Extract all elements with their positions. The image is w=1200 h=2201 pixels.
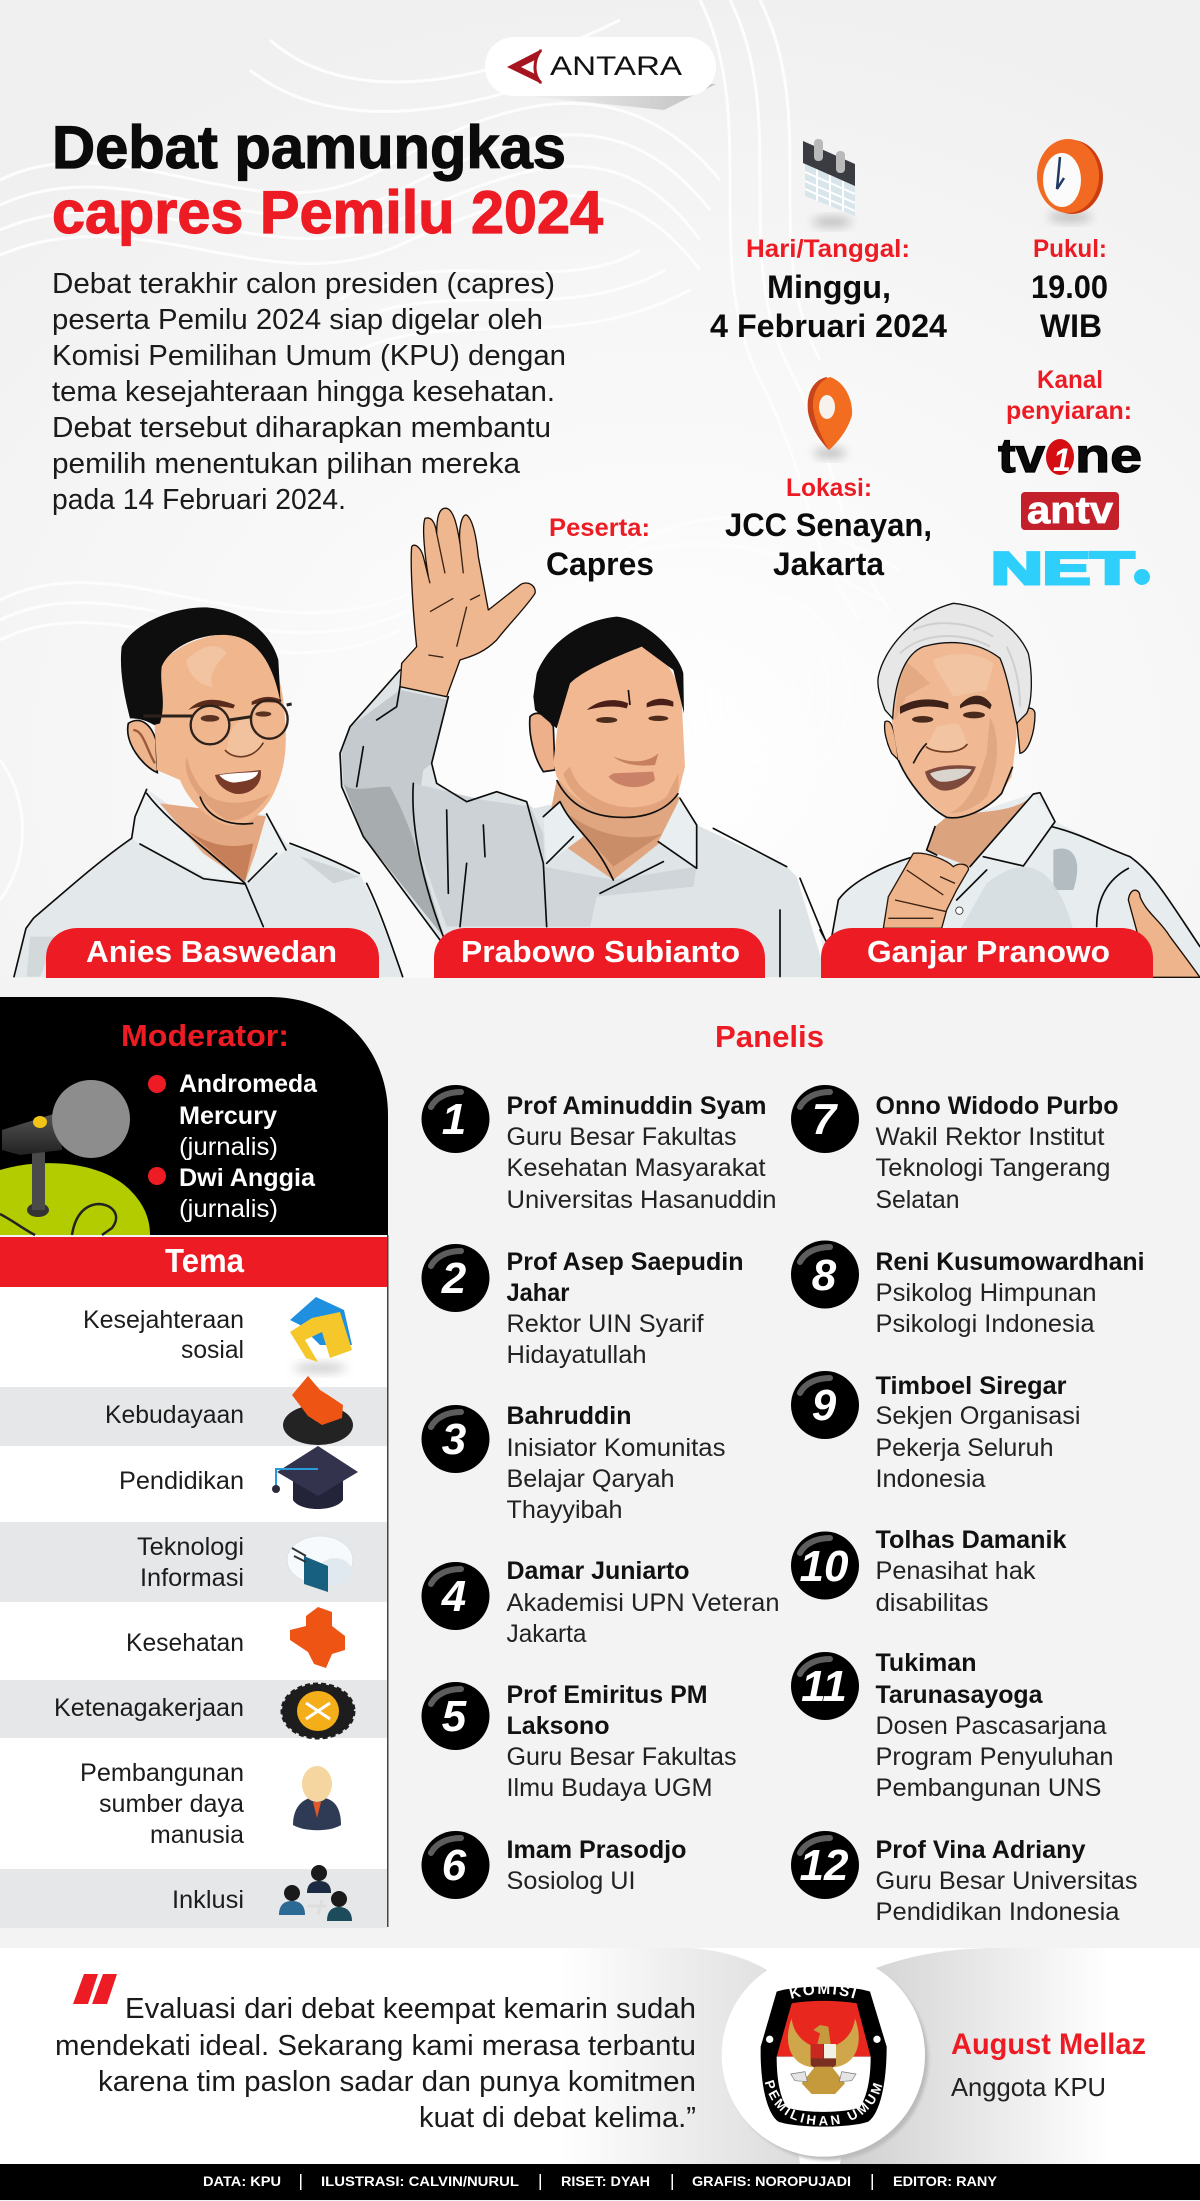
panelist 10: Penasihat hak [876, 1557, 1036, 1585]
footer credits: ILUSTRASI: CALVIN/NURUL [321, 2174, 519, 2189]
labels: date: Minggu, [767, 269, 891, 305]
theme: Kesejahteraan sosial: sosial [181, 1336, 244, 1364]
quote text: kuat di debat kelima.” [419, 2102, 696, 2134]
illustration: Ganjar Pranowo [820, 603, 1200, 977]
title [52, 114, 604, 246]
labels: broadcast channels: penyiaran: [1006, 397, 1132, 425]
logo: NET: NET [991, 543, 1134, 594]
labels: time: WIB [1040, 308, 1102, 344]
quote text [55, 1993, 696, 2134]
panel: moderator [0, 997, 388, 1235]
labels: broadcast channels [1006, 366, 1132, 425]
panelist 3: Bahruddin [506, 1402, 632, 1430]
panelist 4: 4 [441, 1572, 466, 1621]
quote text: Evaluasi dari debat keempat kemarin sudah [125, 1993, 696, 2025]
panelist 4: Akademisi UPN Veteran [506, 1589, 780, 1617]
icon: quote marks [73, 1974, 117, 2004]
intro text block: pemilih menentukan pilihan mereka [52, 448, 521, 480]
theme: Kebudayaan [105, 1376, 353, 1445]
panelist 10: disabilitas [876, 1589, 988, 1617]
name tag: Anies Baswedan [46, 928, 379, 978]
theme: Pembangunan sumber daya manusia [80, 1759, 341, 1849]
title: capres Pemilu 2024 [52, 179, 604, 246]
panelist 2: Prof Asep Saepudin [506, 1248, 744, 1276]
panelist 7: Onno Widodo Purbo [876, 1092, 1118, 1120]
panel: themes [0, 1235, 388, 1928]
panelist 11 [791, 1649, 1114, 1802]
footer credits: DATA: KPU [203, 2174, 281, 2189]
panelist 12: Pendidikan Indonesia [876, 1898, 1120, 1926]
name tag: Prabowo Subianto: Prabowo Subianto [461, 934, 740, 969]
intro text block: pada 14 Februari 2024. [52, 484, 346, 516]
moderator list: (jurnalis) [179, 1133, 278, 1161]
panelist 8: 8 [812, 1251, 837, 1300]
KPU logo badge: PEMILIHAN UMUM [764, 2080, 882, 2126]
source: August Mellaz [951, 2028, 1146, 2102]
panelist 5: Guru Besar Fakultas [506, 1743, 736, 1771]
theme: Teknologi Informasi: Informasi [140, 1564, 244, 1592]
panelist 10: Tolhas Damanik [876, 1526, 1067, 1554]
intro text block: Komisi Pemilihan Umum (KPU) dengan [52, 340, 566, 372]
panelist 11: Tarunasayoga [876, 1681, 1044, 1709]
heading: panelis: Panelis [715, 1019, 824, 1054]
panelist 8: Psikolog Himpunan [876, 1279, 1096, 1307]
labels: location: Jakarta [773, 546, 884, 582]
panelist 10: 10 [800, 1542, 849, 1591]
panelist 7: Teknologi Tangerang [876, 1154, 1110, 1182]
panelist 9 [791, 1371, 1080, 1493]
quote text: mendekati ideal. Sekarang kami merasa terbantu [55, 2030, 696, 2062]
theme: Ketenagakerjaan [54, 1684, 354, 1738]
source: August Mellaz: Anggota KPU [951, 2072, 1106, 2102]
logo: antv: antv [1027, 490, 1113, 532]
theme: Kesehatan: Kesehatan [126, 1629, 244, 1657]
logo: tvOne: 1 [1053, 442, 1071, 478]
name tag: Anies Baswedan: Anies Baswedan [86, 934, 337, 969]
panelist 1: Universitas Hasanuddin [506, 1186, 776, 1214]
labels: time: 19.00 [1031, 269, 1108, 305]
moderator list: Andromeda [179, 1070, 318, 1098]
theme: Kesejahteraan sosial: Kesejahteraan [83, 1306, 244, 1334]
heading: tema [0, 1237, 387, 1287]
labels: location [725, 474, 932, 582]
panelist 1: Guru Besar Fakultas [506, 1123, 736, 1151]
panelist 2: Jahar [506, 1279, 570, 1307]
panelist 11: Dosen Pascasarjana [876, 1712, 1107, 1740]
intro text block [52, 268, 566, 516]
theme: Teknologi Informasi: Teknologi [137, 1533, 244, 1561]
panelist 8: Reni Kusumowardhani [876, 1248, 1144, 1276]
footer credits [0, 2164, 1200, 2200]
intro text block: Debat tersebut diharapkan membantu [52, 412, 551, 444]
panelist 12 [791, 1831, 1138, 1926]
logo: ANTARA [485, 37, 716, 110]
theme: Kebudayaan: Kebudayaan [105, 1401, 244, 1429]
labels: date: Hari/Tanggal: [746, 235, 910, 263]
label: participants: Peserta: [549, 514, 650, 542]
panelist 8 [791, 1240, 1144, 1338]
panelist 1: 1 [442, 1095, 466, 1144]
panelist 2 [422, 1244, 744, 1369]
panelist 6: Sosiolog UI [506, 1867, 636, 1895]
intro text block: Debat terakhir calon presiden (capres) [52, 268, 555, 300]
panelist 5: Laksono [506, 1712, 610, 1740]
panelist 11: Tukiman [876, 1649, 976, 1677]
panelist 6 [422, 1831, 686, 1899]
panelist 10 [791, 1526, 1067, 1617]
panelist 9: Indonesia [876, 1465, 986, 1493]
icon: clock [1037, 139, 1103, 222]
panelist 3: 3 [442, 1415, 466, 1464]
moderator list: Mercury [179, 1102, 277, 1130]
label: participants: Capres [546, 546, 654, 582]
icon: microphone [0, 1080, 150, 1235]
logo: NET [991, 543, 1150, 594]
panelist 5: Ilmu Budaya UGM [506, 1774, 712, 1802]
panelist 7 [791, 1085, 1118, 1214]
name tag: Prabowo Subianto [434, 928, 765, 978]
panelist 2: 2 [441, 1254, 467, 1303]
heading: tema: Tema [165, 1242, 245, 1279]
panelist 3: Belajar Qaryah [506, 1465, 674, 1493]
illustration: Prabowo Subianto [340, 508, 827, 977]
footer credits: EDITOR: RANY [893, 2174, 997, 2189]
labels: broadcast channels: Kanal [1037, 366, 1103, 394]
panelist 2: Hidayatullah [506, 1341, 646, 1369]
logo: tvOne: tv [998, 430, 1045, 483]
moderator list [148, 1070, 318, 1223]
KPU logo badge [722, 1968, 930, 2162]
theme: Kesehatan [126, 1607, 345, 1668]
source: August Mellaz: August Mellaz [951, 2028, 1146, 2061]
panelist 3: Inisiator Komunitas [506, 1434, 726, 1462]
panelist 9: 9 [812, 1381, 837, 1430]
panelist 4 [422, 1557, 780, 1648]
KPU logo badge: KOMISI [789, 1986, 856, 1999]
name tag: Ganjar Pranowo [821, 928, 1153, 978]
panelist 12: Guru Besar Universitas [876, 1867, 1138, 1895]
logo: tvOne: ne [1075, 430, 1142, 483]
panelist 8: Psikologi Indonesia [876, 1310, 1095, 1338]
panelist 7: Wakil Rektor Institut [876, 1123, 1105, 1151]
panelist 5: 5 [442, 1692, 467, 1741]
panelist 3 [422, 1402, 726, 1524]
quote text: karena tim paslon sadar dan punya komitmen [98, 2066, 696, 2098]
theme: Pendidikan [119, 1446, 358, 1509]
moderator list: (jurnalis) [179, 1195, 278, 1223]
illustration: Anies Baswedan [14, 607, 403, 977]
title: Debat pamungkas [52, 114, 566, 181]
theme: Teknologi Informasi [137, 1533, 353, 1592]
heading: moderator: Moderator: [121, 1018, 289, 1053]
intro text block: peserta Pemilu 2024 siap digelar oleh [52, 304, 543, 336]
theme: Pembangunan sumber daya manusia: sumber daya [99, 1790, 244, 1818]
panelist 9: Pekerja Seluruh [876, 1434, 1054, 1462]
panelist 3: Thayyibah [506, 1496, 622, 1524]
labels: date [710, 235, 947, 344]
theme: Ketenagakerjaan: Ketenagakerjaan [54, 1694, 244, 1722]
panelist 5: Prof Emiritus PM [506, 1681, 708, 1709]
panelist 4: Damar Juniarto [506, 1557, 690, 1585]
labels: time: Pukul: [1033, 235, 1107, 263]
theme: Kesejahteraan sosial [83, 1297, 352, 1373]
theme: Pendidikan: Pendidikan [119, 1467, 244, 1495]
panelist 11: Program Penyuluhan [876, 1743, 1114, 1771]
logo: tvOne [998, 430, 1142, 483]
footer credits: RISET: DYAH [561, 2174, 650, 2189]
panelist 12: 12 [800, 1841, 849, 1890]
panel: quote [0, 1948, 1200, 2164]
panelist 6: 6 [442, 1841, 467, 1890]
panelist 7: 7 [812, 1095, 839, 1144]
panelist 2: Rektor UIN Syarif [506, 1310, 704, 1338]
panelist 9: Sekjen Organisasi [876, 1402, 1080, 1430]
name tag: Ganjar Pranowo: Ganjar Pranowo [867, 934, 1110, 969]
panelist 6: Imam Prasodjo [506, 1836, 686, 1864]
panelist 11: Pembangunan UNS [876, 1774, 1102, 1802]
panelist 11: 11 [801, 1662, 847, 1711]
theme: Pembangunan sumber daya manusia: Pembangunan [80, 1759, 244, 1787]
intro text block: tema kesejahteraan hingga kesehatan. [52, 376, 555, 408]
panelist 5 [422, 1681, 736, 1802]
theme: Inklusi: Inklusi [172, 1886, 244, 1914]
labels: location: Lokasi: [786, 474, 872, 502]
labels: time [1031, 235, 1108, 344]
moderator list: Dwi Anggia [179, 1164, 316, 1192]
theme: Pembangunan sumber daya manusia: manusia [150, 1821, 244, 1849]
panelist 1: Kesehatan Masyarakat [506, 1154, 766, 1182]
labels: location: JCC Senayan, [725, 507, 932, 543]
panelist 1: Prof Aminuddin Syam [506, 1092, 766, 1120]
icon: calendar [803, 139, 855, 227]
labels: date: 4 Februari 2024 [710, 308, 947, 344]
label: participants [546, 514, 654, 582]
icon: location pin [808, 377, 852, 458]
panelist 12: Prof Vina Adriany [876, 1836, 1086, 1864]
logo: ANTARA: ANTARA [550, 51, 682, 81]
theme: Inklusi [172, 1865, 352, 1921]
panelist 9: Timboel Siregar [876, 1372, 1067, 1400]
panelist 1 [422, 1085, 776, 1214]
panelist 4: Jakarta [506, 1620, 587, 1648]
panelist 7: Selatan [876, 1186, 960, 1214]
footer credits: GRAFIS: NOROPUJADI [692, 2174, 851, 2189]
